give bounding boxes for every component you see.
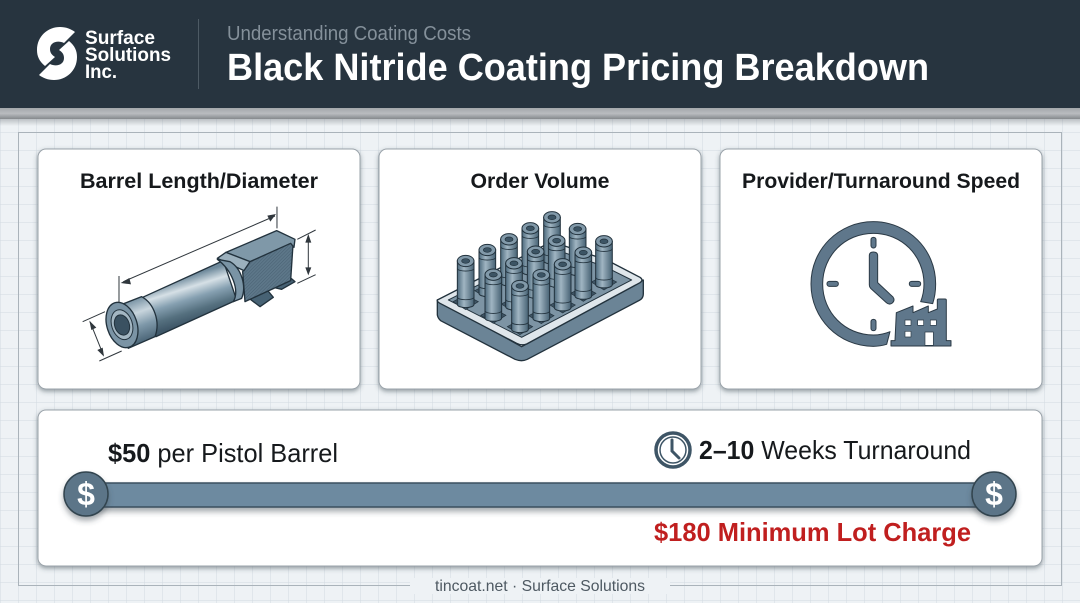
icon: dollar start: $ xyxy=(77,476,95,512)
panel: pricing bar xyxy=(38,410,1042,566)
price range bar xyxy=(85,483,995,507)
subtitle: Understanding Coating Costs xyxy=(227,23,471,45)
heading: Provider/Turnaround Speed xyxy=(742,170,1020,193)
heading: Barrel Length/Diameter xyxy=(80,170,318,193)
panel: barrel length/diameter xyxy=(38,149,360,389)
panel: provider/turnaround speed xyxy=(720,149,1042,389)
icon: dollar end xyxy=(972,472,1016,516)
logo wordmark: Inc. xyxy=(85,62,117,83)
header band xyxy=(0,0,1080,119)
title: Black Nitride Coating Pricing Breakdown xyxy=(227,47,929,89)
price label: $50 per Pistol Barrel xyxy=(108,438,338,468)
heading: Order Volume xyxy=(470,170,610,193)
icon: dollar start xyxy=(64,472,108,516)
icon: clock with factory xyxy=(811,222,951,346)
footer: tincoat.net · Surface Solutions xyxy=(435,578,645,595)
icon: factory xyxy=(891,299,951,346)
logo wordmark: Solutions xyxy=(85,45,171,66)
panel: order volume xyxy=(379,149,701,389)
icon: S mark xyxy=(37,27,77,80)
icon: small clock xyxy=(656,433,690,467)
logo wordmark xyxy=(85,28,171,83)
icon: dollar end: $ xyxy=(985,476,1003,512)
icon: barrel rack xyxy=(437,212,643,361)
logo wordmark: Surface xyxy=(85,28,155,49)
logo xyxy=(37,27,171,83)
turnaround label: 2–10 Weeks Turnaround xyxy=(699,435,971,465)
metal strip xyxy=(0,108,1080,119)
icon: pistol barrel with dimension arrows xyxy=(83,207,316,361)
minimum lot charge: $180 Minimum Lot Charge xyxy=(654,517,971,547)
